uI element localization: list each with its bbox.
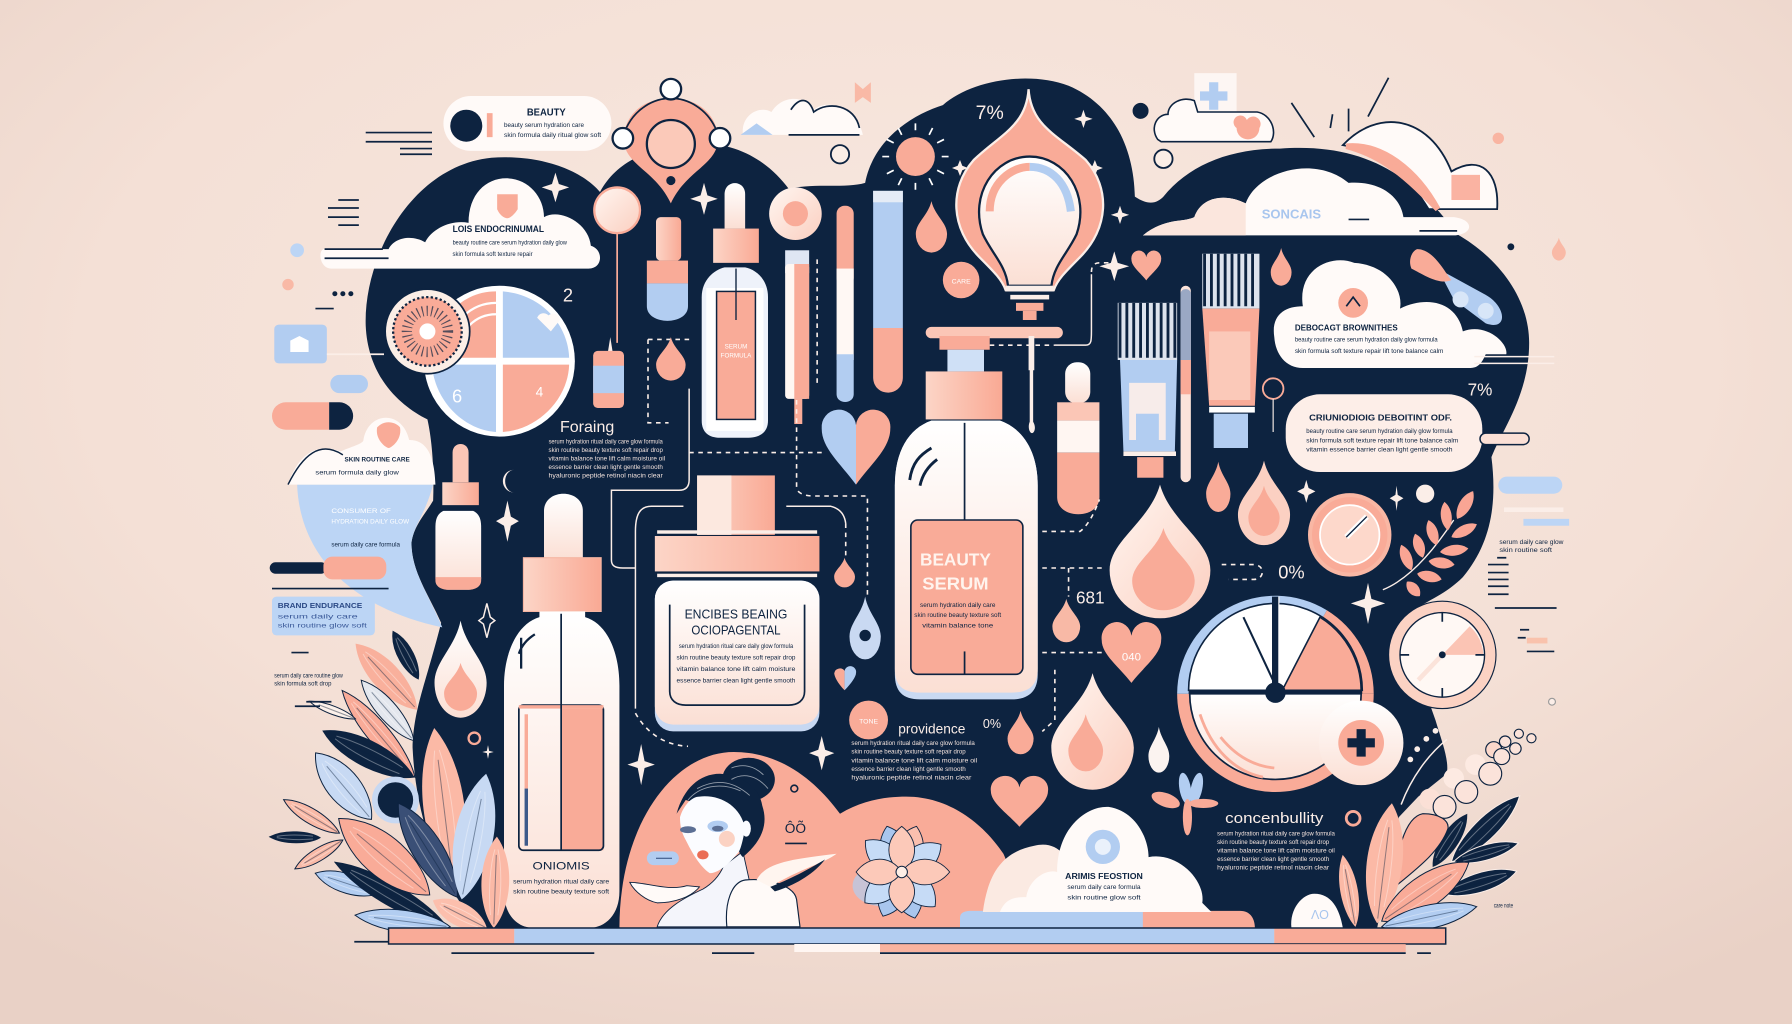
cloud bottom: ARIMIS FEOSTION xyxy=(1065,871,1143,881)
lines left of top cloud xyxy=(328,200,359,225)
crescent and star xyxy=(496,470,519,542)
section text: providence: providence xyxy=(898,722,966,737)
round salmon tag xyxy=(943,262,979,298)
section text: concenbullity: skin routine beauty texture soft repair drop xyxy=(1217,840,1330,846)
jar: OCIOPAGENTAL xyxy=(691,623,781,637)
stars around bulb xyxy=(952,110,1129,224)
section text: providence: serum hydration ritual daily care glow formula xyxy=(851,741,976,747)
cloud: right text: beauty routine care serum hydration daily glow formula xyxy=(1295,338,1438,344)
drop salmon thin xyxy=(1271,248,1292,286)
heart lower xyxy=(991,776,1048,827)
drop salmon top xyxy=(916,201,947,253)
section text: providence: 0% xyxy=(983,717,1001,731)
bottle large left: serum hydration ritual daily care xyxy=(513,879,610,885)
dropper mini xyxy=(1057,362,1099,514)
dropper medium: SERUM xyxy=(725,344,747,351)
small symbols near woman xyxy=(785,785,807,843)
icon: small ring xyxy=(831,145,849,163)
bottle large center xyxy=(895,327,1063,699)
cloud: upper left text xyxy=(320,178,600,269)
pen 2 xyxy=(837,206,854,402)
cloud: upper left text: LOIS ENDOCRINUMAL xyxy=(453,224,544,234)
dashed connectors xyxy=(635,259,867,746)
cloud bottom: serum daily care formula xyxy=(1067,885,1141,891)
round tag xyxy=(849,701,888,739)
pin small right xyxy=(1263,378,1283,432)
cloud: right text xyxy=(1274,260,1554,368)
ring xyxy=(1346,811,1360,825)
flower salmon-blue small xyxy=(1149,772,1218,835)
heart small top xyxy=(1131,250,1161,280)
cloud: sources: SONCAIS xyxy=(1262,207,1321,221)
stat: 2: 2 xyxy=(563,285,573,306)
small navy dot xyxy=(1133,103,1149,119)
top pill: beauty xyxy=(443,96,611,151)
left small text xyxy=(274,653,343,706)
small vial xyxy=(593,337,624,408)
text in blue panel: CONSUMER OF xyxy=(331,508,391,515)
section text: concenbullity: essence barrier clean light gentle smooth xyxy=(1217,857,1329,863)
jar: ENCIBES BEAING xyxy=(685,607,787,621)
cloud: sources xyxy=(1143,168,1469,235)
left pill with bar xyxy=(270,557,389,589)
drop large middle xyxy=(1051,673,1134,790)
plant right lavender xyxy=(1401,728,1536,818)
left small text: skin formula soft drop xyxy=(274,682,332,688)
lines left of pill xyxy=(366,133,432,154)
left small text: serum daily care routine glow xyxy=(274,674,343,680)
jar: vitamin balance tone lift calm moisture xyxy=(677,667,796,673)
section text: foraging: skin routine beauty texture soft repair drop xyxy=(549,448,664,454)
right small items xyxy=(1488,477,1569,705)
chart: pie: 4 xyxy=(536,385,544,400)
text in blue panel: HYDRATION DAILY GLOW xyxy=(331,518,410,525)
section text: concenbullity: concenbullity xyxy=(1225,811,1324,827)
compact dial xyxy=(1307,493,1392,577)
tube salmon xyxy=(1202,254,1259,448)
bottle large center: BEAUTY xyxy=(920,550,991,570)
illustration: woman xyxy=(630,758,837,927)
small top cloud xyxy=(741,99,863,135)
drop dark tint xyxy=(1052,599,1080,642)
dashed connectors center right xyxy=(1042,499,1104,731)
radiating dashes xyxy=(1291,78,1389,137)
section text: foraging: vitamin balance tone lift calm moisture oil xyxy=(549,457,665,463)
section text: providence: hyaluronic peptide retinol niacin clear xyxy=(851,775,971,781)
small drop floating xyxy=(1552,238,1566,261)
connector: pump to star xyxy=(990,263,1111,345)
chart: gauge xyxy=(1177,596,1374,792)
tube blue xyxy=(1118,303,1177,478)
top pill: beauty: beauty serum hydration care xyxy=(504,123,585,129)
bottle large center: SERUM xyxy=(922,574,989,594)
section text: concenbullity: vitamin balance tone lift calm moisture oil xyxy=(1217,849,1335,855)
clock dial xyxy=(1389,601,1496,709)
small ring and star in navy xyxy=(469,733,494,759)
dotted drop blue xyxy=(850,597,881,659)
left pill: salmon navy xyxy=(272,402,353,430)
pill: right text: CRIUNIODIOIG DEBOITINT ODF. xyxy=(1309,413,1452,423)
section text: concenbullity xyxy=(1217,811,1336,872)
small salmon drop xyxy=(834,558,855,587)
small text right bottom: care note xyxy=(1494,903,1514,909)
dropper medium xyxy=(702,183,768,438)
cloud: upper left text: beauty routine care serum hydration daily glow xyxy=(453,241,568,247)
section text: providence xyxy=(851,717,1001,781)
left blue label: serum daily care xyxy=(278,613,359,620)
stat: 0 percent: 0% xyxy=(1278,561,1305,582)
drops cluster xyxy=(1110,461,1290,618)
stat: 7 percent right: 7% xyxy=(1468,379,1492,399)
top pill: beauty: BEAUTY xyxy=(527,107,566,118)
small bottle left xyxy=(435,444,481,590)
cloud bottom xyxy=(960,807,1255,928)
jar xyxy=(655,475,819,731)
leaf branch xyxy=(1383,488,1479,600)
section text: foraging: hyaluronic peptide retinol niacin clear xyxy=(549,474,663,480)
small swab xyxy=(1029,336,1035,433)
dashed bracket xyxy=(1222,565,1262,579)
flower large xyxy=(853,822,950,922)
white droplet xyxy=(1148,727,1169,773)
blue dropper small xyxy=(647,217,688,321)
left pill: blue xyxy=(330,375,368,393)
heart small blue xyxy=(834,666,856,690)
star right xyxy=(1297,480,1403,624)
round tag: TONE xyxy=(859,718,878,725)
cloud: right text: skin formula soft texture repair lift tone balance calm xyxy=(1295,349,1443,355)
section text: providence: skin routine beauty texture soft repair drop xyxy=(851,750,966,756)
text in blue panel: serum daily care formula xyxy=(331,542,401,548)
left blue label: skin routine glow soft xyxy=(278,622,367,629)
woman panel background xyxy=(619,752,1013,928)
cloud lower left: SKIN ROUTINE CARE xyxy=(345,457,410,464)
pill: right text xyxy=(1286,394,1529,472)
icon: sun xyxy=(882,123,949,190)
light blue panel left xyxy=(297,485,442,627)
dome cloud top right xyxy=(1343,122,1497,209)
star top right navy xyxy=(1099,251,1129,281)
pen 1 xyxy=(785,250,809,424)
text in blue panel xyxy=(331,508,410,548)
right small items: serum daily care glow xyxy=(1499,540,1564,546)
bottle large center: vitamin balance tone xyxy=(922,623,994,629)
section text: concenbullity: serum hydration ritual daily care glow formula xyxy=(1217,831,1336,837)
drop left xyxy=(435,621,487,718)
icon: blob capsule xyxy=(1410,249,1502,325)
section text: concenbullity: hyaluronic peptide retinol niacin clear xyxy=(1217,866,1329,872)
heart with label xyxy=(1102,622,1161,683)
section text: providence: vitamin balance tone lift calm moisture oil xyxy=(851,758,977,764)
icon: lollipop xyxy=(594,187,640,343)
stat: 681: 681 xyxy=(1076,587,1105,607)
icon: sunburst dial xyxy=(385,289,470,374)
drop with dashed box xyxy=(648,337,693,423)
left icon: blue square xyxy=(274,325,384,363)
base bar xyxy=(354,928,1446,953)
left blue label xyxy=(272,597,375,635)
jar: essence barrier clean light gentle smooth xyxy=(677,678,795,684)
icon: salmon pin xyxy=(613,79,730,203)
plant leaves left xyxy=(270,628,511,938)
globe icon xyxy=(1416,485,1434,503)
right small items: skin routine soft xyxy=(1499,548,1552,554)
small symbols near woman: ÔÕ xyxy=(785,820,806,836)
button: plus xyxy=(1319,701,1403,785)
section text: foraging xyxy=(549,419,665,480)
icon: light bulb xyxy=(956,89,1103,320)
icon: bowtie xyxy=(855,82,871,103)
top pill: beauty: skin formula daily ritual glow soft xyxy=(504,133,602,139)
cloud lower left xyxy=(288,418,435,485)
bottle large center: skin routine beauty texture soft xyxy=(914,613,1002,619)
star outline xyxy=(479,603,495,638)
plant leaves right xyxy=(1334,788,1527,938)
left dots xyxy=(282,243,353,309)
panel: navy cloud backdrop xyxy=(366,79,1529,928)
chart: pie xyxy=(424,286,575,437)
pill: right text: vitamin essence barrier clean light gentle smooth xyxy=(1306,447,1453,453)
bottle large center: serum hydration daily care xyxy=(920,603,996,609)
bottle large left: ONIOMIS xyxy=(533,861,590,873)
cloud: upper left text: skin formula soft texture repair xyxy=(453,252,533,258)
heart blue salmon xyxy=(822,410,890,485)
jar: serum hydration ritual care daily glow formula xyxy=(679,644,794,650)
stat: 7 percent top: 7% xyxy=(976,102,1004,124)
stars xyxy=(542,173,718,215)
dropper medium: FORMULA xyxy=(721,353,752,360)
bottle large left xyxy=(504,494,619,928)
cloud small bottom right xyxy=(1291,894,1343,928)
section text: providence: essence barrier clean light gentle smooth xyxy=(851,767,966,773)
small ring top xyxy=(1154,150,1173,168)
small drops xyxy=(1008,711,1034,754)
connector lines xyxy=(611,389,846,709)
pill: right text: skin formula soft texture repair lift tone balance calm xyxy=(1306,438,1458,444)
section text: foraging: Foraing xyxy=(560,419,614,436)
cloud bottom: skin routine glow soft xyxy=(1067,895,1141,901)
cloud small bottom right: ΛΟ xyxy=(1311,908,1329,922)
jar: skin routine beauty texture soft repair drop xyxy=(677,655,796,661)
section text: foraging: serum hydration ritual daily care glow formula xyxy=(549,439,664,445)
compact round xyxy=(769,187,822,240)
tube blue salmon xyxy=(873,191,903,393)
thin pen right xyxy=(1181,286,1191,482)
chart: pie: 6 xyxy=(452,385,462,406)
salmon dot right xyxy=(1493,133,1504,144)
cloud: right text: DEBOCAGT BROWNITHES xyxy=(1295,323,1398,332)
heart with label: 040 xyxy=(1122,652,1141,664)
left blue label: BRAND ENDURANCE xyxy=(278,601,362,610)
stars near jar xyxy=(627,736,834,785)
section text: foraging: essence barrier clean light gentle smooth xyxy=(549,465,663,471)
navy dot right xyxy=(1507,243,1514,250)
cross cloud top right xyxy=(1154,73,1274,142)
pill: right text: beauty routine care serum hydration daily glow formula xyxy=(1306,429,1453,435)
round salmon tag: CARE xyxy=(952,278,971,285)
bottle large left: skin routine beauty texture soft xyxy=(513,890,610,896)
cloud lower left: serum formula daily glow xyxy=(315,470,400,476)
